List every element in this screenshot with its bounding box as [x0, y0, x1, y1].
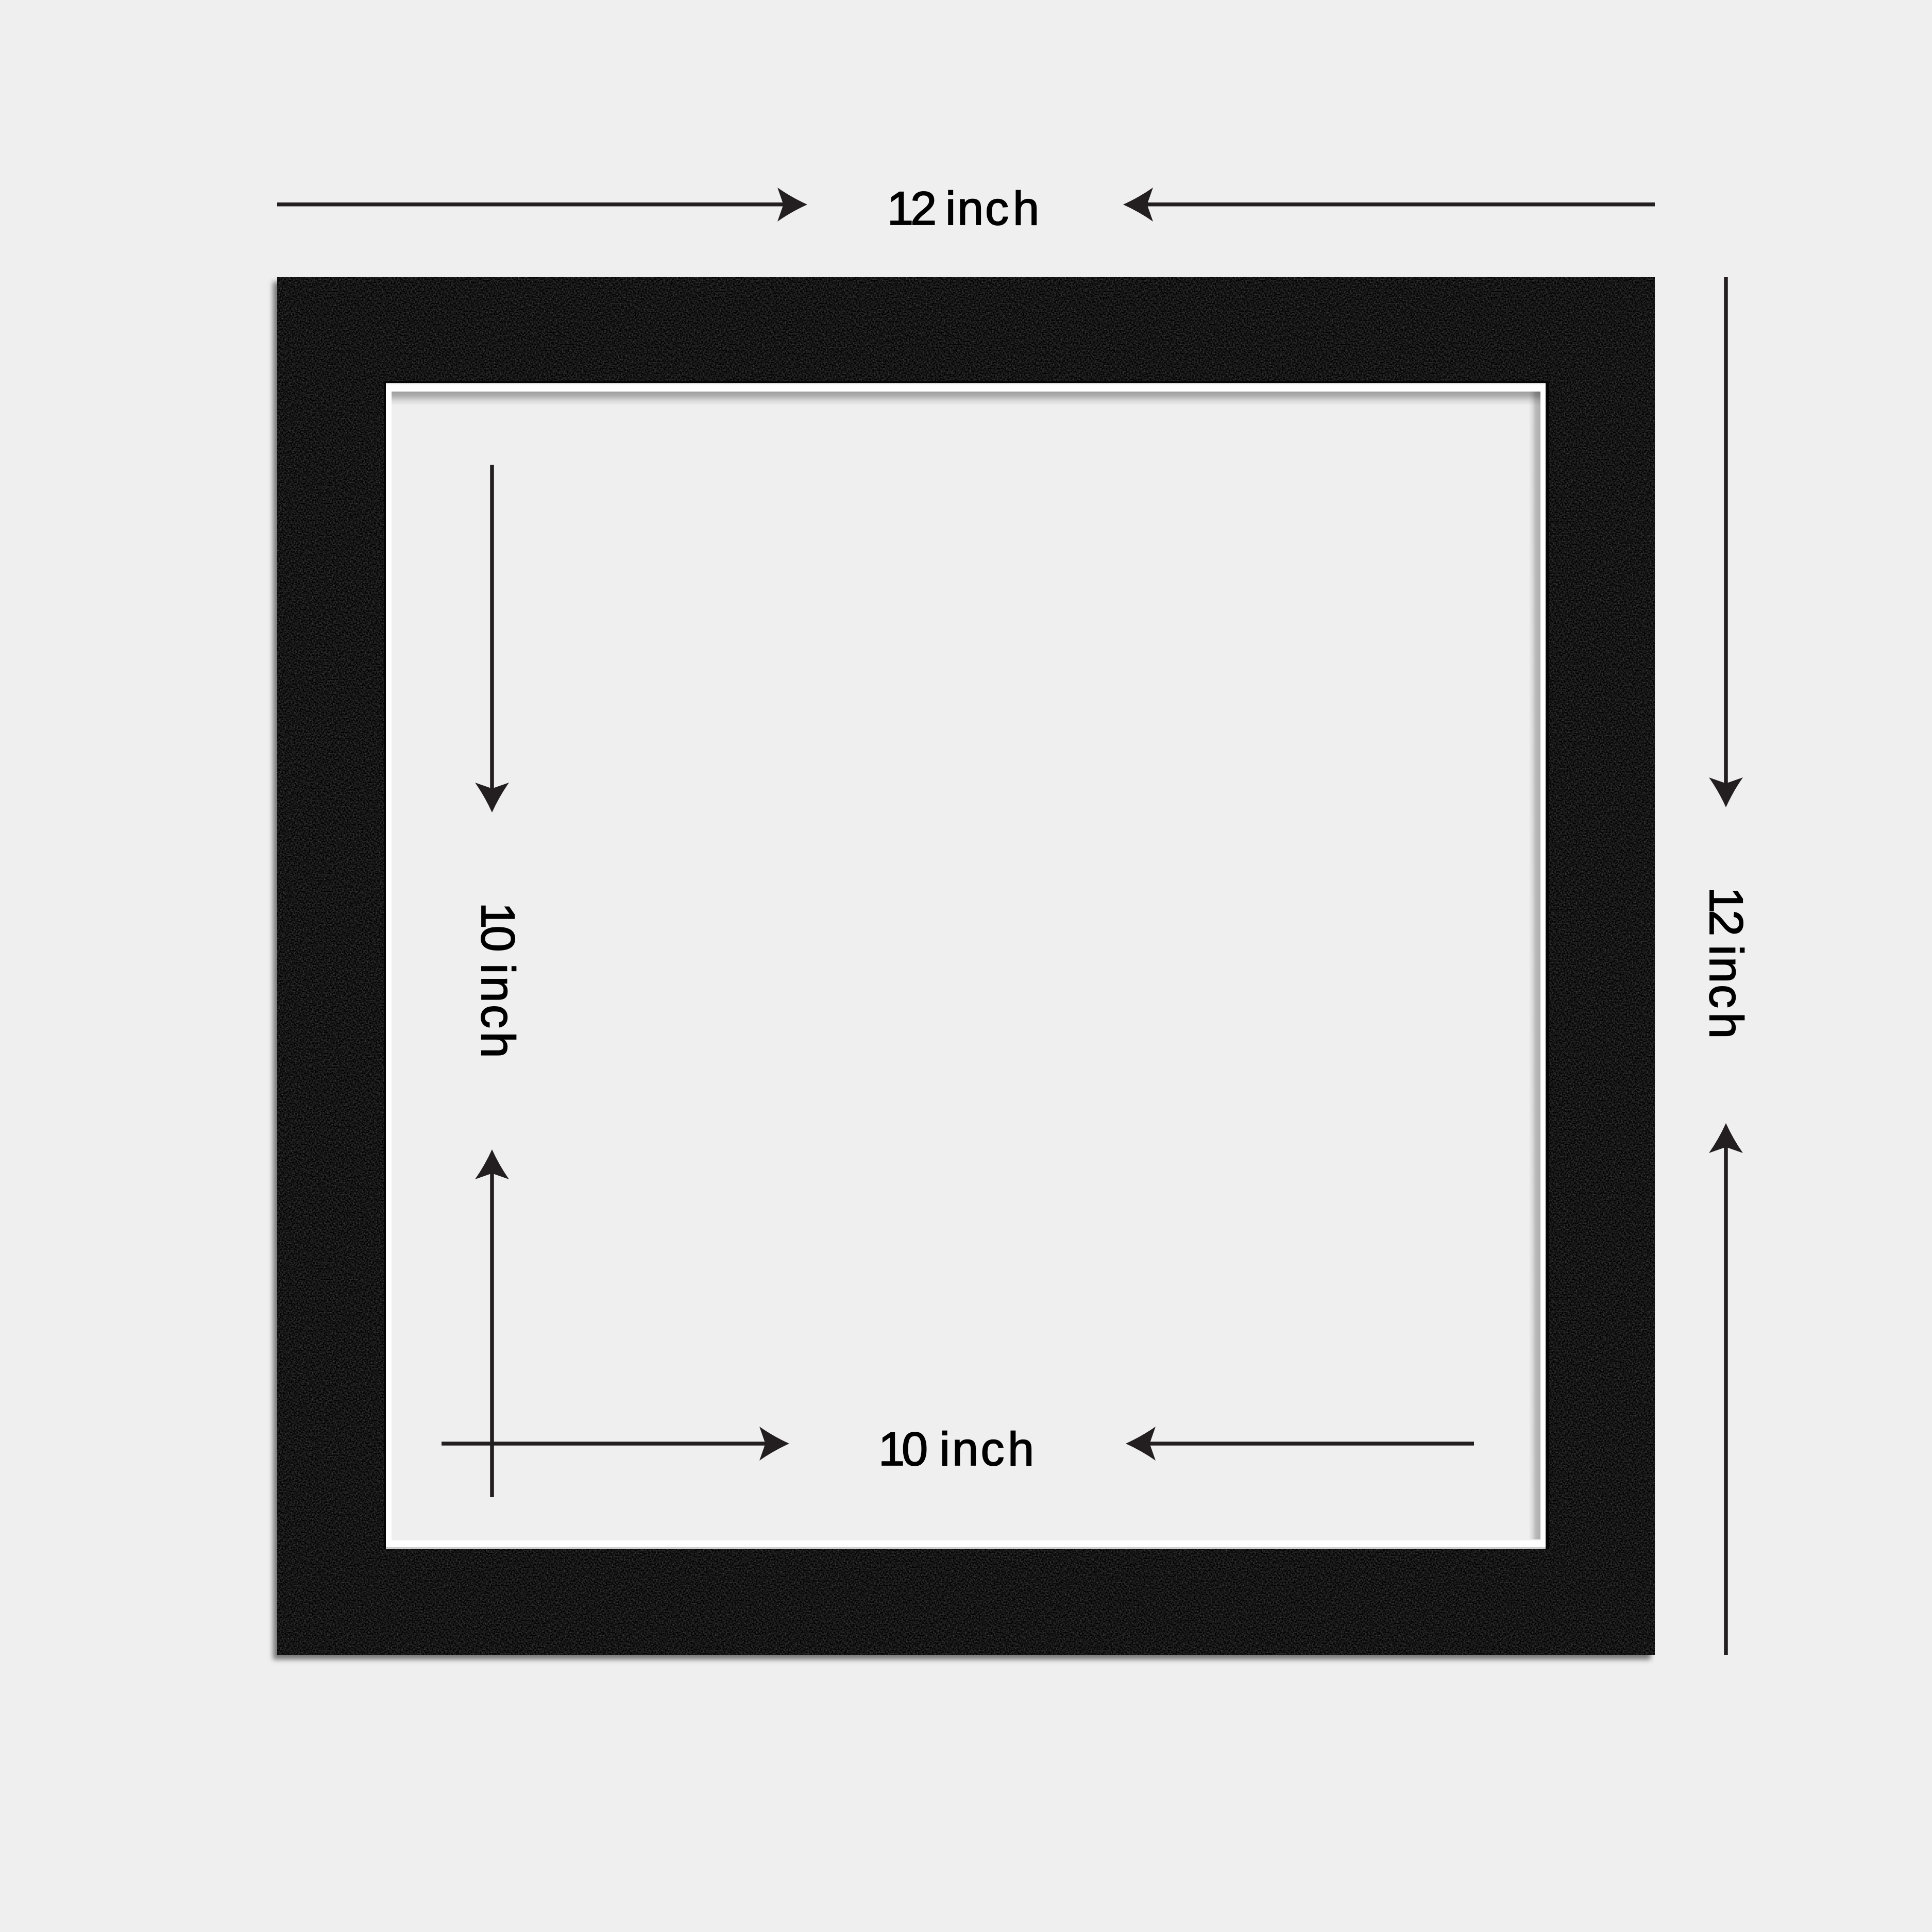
label: right height 12 inch: 12 inch	[1700, 887, 1752, 1039]
opening interior	[392, 392, 1540, 1540]
white bevel	[386, 383, 1546, 1549]
panel: black photo mat	[273, 277, 1655, 1659]
arrow: inner height, pointing up	[475, 1149, 509, 1497]
label: inner width 10 inch: 10 inch	[878, 1423, 1034, 1476]
arrow: top width, pointing left	[1123, 188, 1655, 222]
mat drop shadow	[273, 282, 1651, 1659]
arrow: top width, pointing right	[277, 188, 807, 222]
label: inner height 10 inch: 10 inch	[471, 903, 524, 1058]
arrow: inner height, pointing down	[475, 465, 509, 812]
arrow: right height, pointing down	[1709, 277, 1743, 807]
opening dark cut edge	[384, 381, 1549, 1549]
arrow: inner width, pointing left	[1126, 1427, 1474, 1461]
bevel lower edge	[386, 1547, 1546, 1549]
mat board	[277, 277, 1655, 1655]
arrow: inner width, pointing right	[442, 1427, 789, 1461]
arrow: right height, pointing up	[1709, 1123, 1743, 1655]
bevel upper edge	[386, 383, 1546, 384]
label: top width 12 inch: 12 inch	[887, 182, 1039, 235]
